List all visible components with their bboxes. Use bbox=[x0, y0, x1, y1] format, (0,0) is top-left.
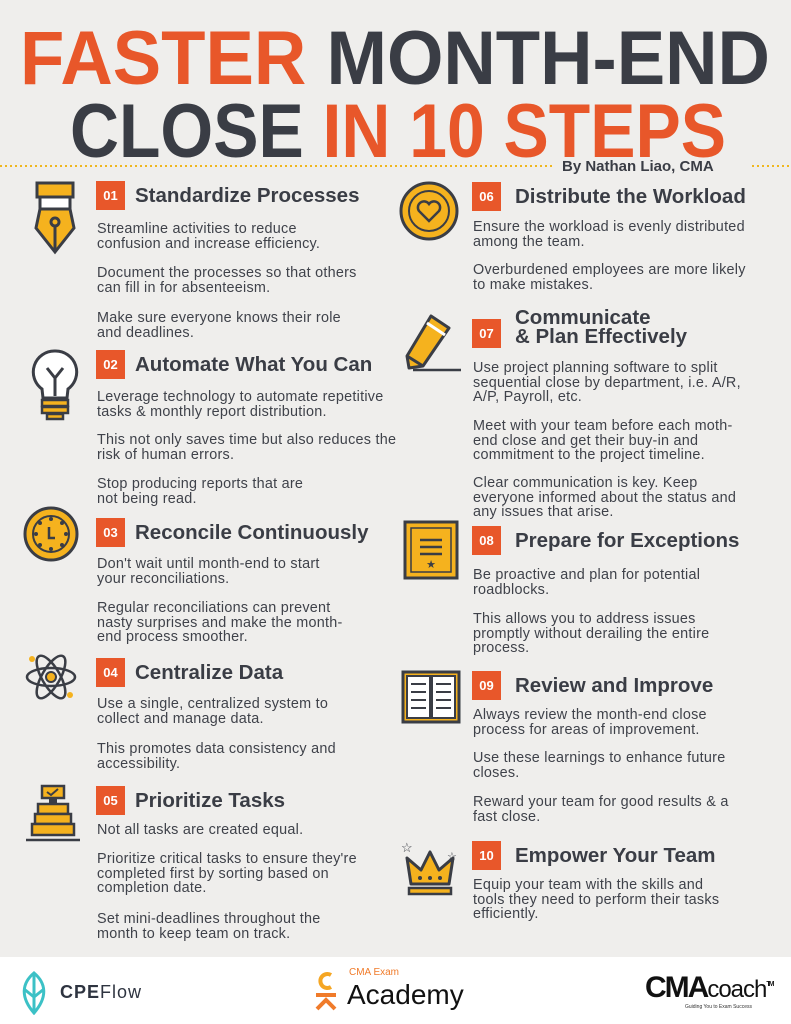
step 07: sequential close by department, i.e. A/R, bbox=[473, 375, 741, 391]
step 03: Reconcile Continuously bbox=[135, 521, 368, 544]
step 05: Not all tasks are created equal. bbox=[97, 822, 303, 838]
step 03 bbox=[24, 506, 368, 645]
step 01: can fill in for absenteeism. bbox=[97, 280, 270, 296]
step 10: efficiently. bbox=[473, 906, 539, 922]
logo: CPEFlow: CPEFlow bbox=[60, 982, 142, 1002]
step 10 bbox=[401, 840, 719, 922]
step 05: Prioritize critical tasks to ensure they're bbox=[97, 851, 357, 867]
step 06: among the team. bbox=[473, 234, 585, 250]
step 02 bbox=[32, 350, 396, 507]
icon: certificate: ★ bbox=[426, 559, 436, 571]
step 06: Distribute the Workload bbox=[515, 185, 746, 208]
step 02: not being read. bbox=[97, 491, 197, 507]
step 03: nasty surprises and make the month- bbox=[97, 615, 343, 631]
step 07: everyone informed about the status and bbox=[473, 490, 736, 506]
icon: pencil bbox=[406, 314, 461, 372]
step 10: Equip your team with the skills and bbox=[473, 877, 703, 893]
step 09: process for areas of improvement. bbox=[473, 722, 700, 738]
step 07: Clear communication is key. Keep bbox=[473, 475, 697, 491]
step 01: 01 bbox=[103, 188, 118, 203]
logo: CMAcoach: CMAcoachTM bbox=[645, 971, 772, 1004]
step 02: tasks & monthly report distribution. bbox=[97, 404, 327, 420]
step 02: Automate What You Can bbox=[135, 353, 372, 376]
step 07: commitment to the project timeline. bbox=[473, 447, 705, 463]
step 08: Prepare for Exceptions bbox=[515, 529, 739, 552]
step 04: Use a single, centralized system to bbox=[97, 696, 328, 712]
step 06: Ensure the workload is evenly distributed bbox=[473, 219, 745, 235]
icon: clock bbox=[24, 506, 78, 562]
step 10: Empower Your Team bbox=[515, 844, 716, 867]
step 08: promptly without derailing the entire bbox=[473, 626, 709, 642]
icon: light bulb bbox=[32, 350, 78, 420]
step 01: Standardize Processes bbox=[135, 184, 359, 207]
icon: crown: ☆ bbox=[447, 851, 457, 863]
step 04: collect and manage data. bbox=[97, 711, 264, 727]
footer bbox=[0, 957, 791, 1024]
step 01: Document the processes so that others bbox=[97, 265, 357, 281]
step 06 bbox=[400, 182, 746, 293]
icon: crown: ☆ bbox=[401, 840, 413, 855]
step 05: Prioritize Tasks bbox=[135, 789, 285, 812]
step 05: completed first by sorting based on bbox=[97, 866, 329, 882]
logo: CMA Exam Academy: Academy bbox=[347, 979, 464, 1010]
step 10: 10 bbox=[479, 848, 494, 863]
step 10: tools they need to perform their tasks bbox=[473, 892, 719, 908]
text: any issues that arise. bbox=[473, 504, 614, 520]
step 09 bbox=[402, 670, 729, 825]
step 07: Communicate bbox=[515, 306, 651, 329]
logo: CMA Exam Academy: CMA Exam bbox=[349, 967, 399, 978]
step 08: process. bbox=[473, 640, 529, 656]
icon: crown bbox=[401, 840, 457, 896]
step 02: Leverage technology to automate repetitive bbox=[97, 389, 384, 405]
step 04: 04 bbox=[103, 665, 118, 680]
step 01 bbox=[34, 181, 359, 341]
step 07: A/P, Payroll, etc. bbox=[473, 389, 582, 405]
step 03: your reconciliations. bbox=[97, 571, 229, 587]
step 02: 02 bbox=[103, 357, 118, 372]
step 04: accessibility. bbox=[97, 756, 180, 772]
step 06: to make mistakes. bbox=[473, 277, 593, 293]
icon: stacked tasks bbox=[26, 784, 80, 842]
step 01: Streamline activities to reduce bbox=[97, 221, 297, 237]
step 03: Regular reconciliations can prevent bbox=[97, 600, 331, 616]
step 05 bbox=[26, 784, 357, 942]
icon: heart bbox=[400, 182, 458, 240]
step 04: This promotes data consistency and bbox=[97, 741, 336, 757]
step 01: and deadlines. bbox=[97, 325, 194, 341]
text: fast close. bbox=[473, 809, 541, 825]
step 09: Review and Improve bbox=[515, 674, 713, 697]
logo: CPEFlow bbox=[22, 971, 142, 1015]
step 02: risk of human errors. bbox=[97, 447, 234, 463]
byline: By Nathan Liao, CMA bbox=[562, 158, 714, 175]
icon: certificate bbox=[404, 520, 458, 580]
step 03: Don't wait until month-end to start bbox=[97, 556, 320, 572]
step 08 bbox=[404, 520, 739, 656]
step 09: Always review the month-end close bbox=[473, 707, 707, 723]
icon: book bbox=[402, 670, 460, 724]
step 08: 08 bbox=[479, 533, 494, 548]
step 09: closes. bbox=[473, 765, 520, 781]
step 07: Meet with your team before each moth- bbox=[473, 418, 733, 434]
step 03: 03 bbox=[103, 525, 118, 540]
step 05: month to keep team on track. bbox=[97, 926, 290, 942]
icon: atom bbox=[26, 654, 76, 700]
step 09: Use these learnings to enhance future bbox=[473, 750, 725, 766]
step 04: Centralize Data bbox=[135, 661, 283, 684]
step 06: 06 bbox=[479, 189, 494, 204]
step 05: 05 bbox=[103, 793, 118, 808]
step 02: This not only saves time but also reduces the bbox=[97, 432, 396, 448]
step 09: 09 bbox=[479, 678, 494, 693]
step 05: completion date. bbox=[97, 880, 207, 896]
icon: pen bbox=[34, 182, 76, 254]
step 09: Reward your team for good results & a bbox=[473, 794, 729, 810]
step 08: This allows you to address issues bbox=[473, 611, 696, 627]
title bbox=[0, 16, 789, 170]
step 08: roadblocks. bbox=[473, 582, 549, 598]
step 01: Make sure everyone knows their role bbox=[97, 310, 341, 326]
logo: CMA Exam Academy bbox=[316, 967, 464, 1010]
step 03: end process smoother. bbox=[97, 629, 248, 645]
step 07 bbox=[406, 306, 741, 520]
step 08: Be proactive and plan for potential bbox=[473, 567, 700, 583]
step 07: & Plan Effectively bbox=[515, 325, 687, 348]
step 02: Stop producing reports that are bbox=[97, 476, 303, 492]
logo: CMAcoach: Guiding You to Exam Success bbox=[685, 1004, 752, 1010]
step 07: Use project planning software to split bbox=[473, 360, 718, 376]
step 04 bbox=[26, 654, 336, 772]
step 01: confusion and increase efficiency. bbox=[97, 236, 320, 252]
step 07: 07 bbox=[479, 326, 494, 341]
step 06: Overburdened employees are more likely bbox=[473, 262, 746, 278]
step 07: end close and get their buy-in and bbox=[473, 433, 698, 449]
title: FASTER MONTH-END bbox=[20, 16, 770, 101]
step 05: Set mini-deadlines throughout the bbox=[97, 911, 320, 927]
